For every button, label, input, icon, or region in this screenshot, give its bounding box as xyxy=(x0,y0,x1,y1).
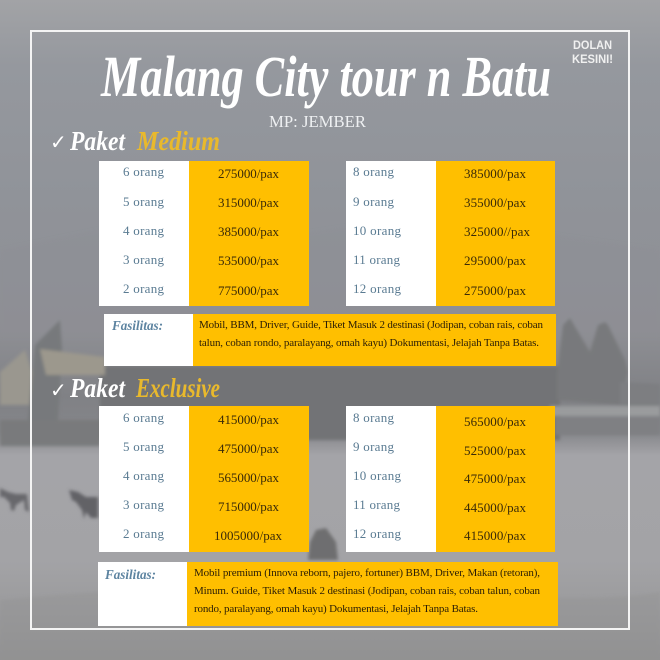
table: medium 6 to 2 orang: 315000/pax xyxy=(218,195,280,210)
table: medium 8 to 12 orang: 8 orang xyxy=(353,164,394,179)
panel: medium facilities: Fasilitas: xyxy=(111,319,163,334)
heading: Paket Medium: Paket xyxy=(69,126,126,156)
panel: exclusive facilities xyxy=(98,562,558,626)
brand mark: Dolan Kesini: DOLAN xyxy=(573,40,612,52)
heading: Paket Exclusive xyxy=(50,373,220,403)
table: exclusive 6 to 2 orang: 2 orang xyxy=(123,526,164,541)
table: medium 6 to 2 orang: 4 orang xyxy=(123,223,164,238)
table: medium 6 to 2 orang: 775000/pax xyxy=(218,283,280,298)
table: exclusive 6 to 2 orang: 475000/pax xyxy=(218,441,280,456)
table: exclusive 8 to 12 orang xyxy=(346,406,555,552)
table: medium 6 to 2 orang xyxy=(99,161,309,306)
heading: Paket Exclusive: Exclusive xyxy=(135,373,220,403)
table: medium 8 to 12 orang: 295000/pax xyxy=(464,253,526,268)
table: medium 8 to 12 orang: 12 orang xyxy=(353,281,402,296)
table: exclusive 6 to 2 orang xyxy=(99,406,309,552)
table: medium 6 to 2 orang: 385000/pax xyxy=(218,224,280,239)
table: medium 8 to 12 orang: 10 orang xyxy=(353,223,402,238)
table: exclusive 8 to 12 orang: 12 orang xyxy=(353,526,402,541)
table: medium 6 to 2 orang: 3 orang xyxy=(123,252,164,267)
heading: Paket Medium: ✓ xyxy=(50,130,67,154)
table: medium 6 to 2 orang: 5 orang xyxy=(123,194,164,209)
table: medium 6 to 2 orang: 535000/pax xyxy=(218,253,280,268)
table: exclusive 8 to 12 orang: 8 orang xyxy=(353,410,394,425)
table: exclusive 8 to 12 orang: 11 orang xyxy=(353,497,400,512)
table: exclusive 6 to 2 orang: 6 orang xyxy=(123,410,164,425)
table: exclusive 6 to 2 orang: 3 orang xyxy=(123,497,164,512)
table: exclusive 6 to 2 orang: 565000/pax xyxy=(218,470,280,485)
table: exclusive 8 to 12 orang: 445000/pax xyxy=(464,500,526,515)
heading: Paket Medium xyxy=(50,126,220,156)
table: medium 6 to 2 orang: 6 orang xyxy=(123,164,164,179)
table: medium 8 to 12 orang: 355000/pax xyxy=(464,195,526,210)
brand mark: Dolan Kesini xyxy=(572,40,613,66)
table: exclusive 8 to 12 orang: 475000/pax xyxy=(464,471,526,486)
panel: medium facilities xyxy=(104,314,556,366)
panel: exclusive facilities: Fasilitas: xyxy=(104,568,156,583)
subtitle: meeting point: MP: JEMBER xyxy=(269,112,367,131)
table: exclusive 6 to 2 orang: 5 orang xyxy=(123,439,164,454)
table: medium 6 to 2 orang: 2 orang xyxy=(123,281,164,296)
panel: medium facilities: Mobil, BBM, Driver, Guide, Tiket Masuk 2 destinasi (Jodipan, coban rais, coban xyxy=(199,319,544,331)
table: exclusive 6 to 2 orang: 715000/pax xyxy=(218,499,280,514)
table: medium 8 to 12 orang: 385000/pax xyxy=(464,166,526,181)
table: exclusive 6 to 2 orang: 1005000/pax xyxy=(214,528,282,543)
panel: exclusive facilities: rondo, paralayang, omah kayu) Dokumentasi, Jelajah Tanpa Batas. xyxy=(194,603,478,615)
table: medium 8 to 12 orang: 325000//pax xyxy=(464,224,530,239)
table: exclusive 6 to 2 orang: 4 orang xyxy=(123,468,164,483)
heading: Paket Exclusive: Paket xyxy=(69,373,126,403)
table: exclusive 8 to 12 orang: 9 orang xyxy=(353,439,394,454)
table: medium 8 to 12 orang: 11 orang xyxy=(353,252,400,267)
heading: Paket Exclusive: ✓ xyxy=(50,378,67,402)
table: medium 6 to 2 orang: 275000/pax xyxy=(218,166,280,181)
panel: exclusive facilities: Mobil premium (Innova reborn, pajero, fortuner) BBM, Driver, Makan (retoran), xyxy=(194,567,540,579)
panel: medium facilities: talun, coban rondo, paralayang, omah kayu) Dokumentasi, Jelajah Tanpa Batas. xyxy=(199,337,539,349)
table: medium 8 to 12 orang: 275000/pax xyxy=(464,283,526,298)
brand mark: Dolan Kesini: KESINI! xyxy=(572,54,613,66)
table: exclusive 8 to 12 orang: 565000/pax xyxy=(464,414,526,429)
table: exclusive 8 to 12 orang: 415000/pax xyxy=(464,528,526,543)
panel: exclusive facilities: Minum. Guide, Tiket Masuk 2 destinasi (Jodipan, coban rais, coban talun, coban xyxy=(194,585,540,597)
table: exclusive 8 to 12 orang: 10 orang xyxy=(353,468,402,483)
table: exclusive 6 to 2 orang: 415000/pax xyxy=(218,412,280,427)
table: medium 8 to 12 orang: 9 orang xyxy=(353,194,394,209)
heading: Paket Medium: Medium xyxy=(136,126,220,156)
table: exclusive 8 to 12 orang: 525000/pax xyxy=(464,443,526,458)
table: medium 8 to 12 orang xyxy=(346,161,555,306)
